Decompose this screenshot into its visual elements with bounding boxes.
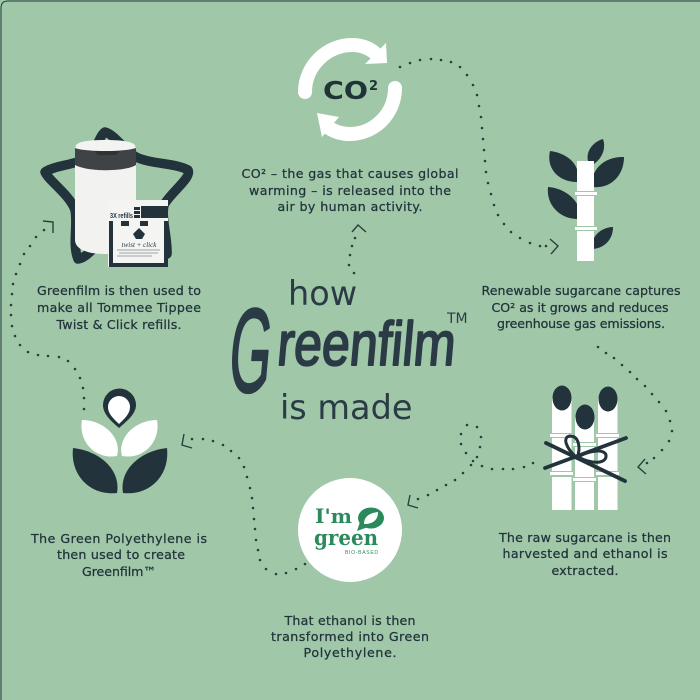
text: harvest step: harvested and ethanol is (502, 546, 668, 561)
dotted arrow: title to CO2 (348, 225, 366, 274)
text: polyethylene step: The Green Polyethylene is (30, 531, 207, 546)
icon: harvested sugarcane bundle (545, 386, 626, 510)
icon: refill box: twist + click (122, 241, 157, 249)
text: ethanol step: That ethanol is then (284, 613, 416, 628)
text: ethanol step (271, 613, 429, 660)
text: refills step: Twist & Click refills. (56, 317, 182, 332)
text: polyethylene step: then used to create (57, 547, 185, 562)
icon: refill box: 3X refills (110, 211, 133, 220)
text: refills step: Greenfilm is then used to (37, 283, 201, 298)
text: sugarcane step (482, 283, 680, 331)
icon: CO2 cycle: CO (323, 76, 368, 105)
icon: I'm green badge: green (314, 525, 378, 550)
dotted arrow: sugarcane to harvest (597, 346, 673, 474)
title: TM (446, 311, 468, 327)
text: sugarcane step: Renewable sugarcane captures (482, 283, 680, 298)
icon: plant with droplet (73, 389, 167, 493)
text: CO2 step: CO² – the gas that causes global (242, 166, 458, 181)
text: CO2 step (242, 166, 458, 214)
icon: I'm green badge: BIO-BASED (345, 550, 378, 556)
title: G (224, 284, 278, 418)
text: CO2 step: warming – is released into the (249, 183, 451, 198)
icon: star behind bin and refill box (45, 132, 188, 259)
icon: CO2 cycle: 2 (369, 79, 378, 94)
icon: I'm green badge (298, 478, 402, 582)
icon: bamboo (548, 139, 624, 261)
text: harvest step: The raw sugarcane is then (498, 530, 671, 545)
text: polyethylene step: Greenfilm™ (82, 564, 156, 579)
text: refills step (37, 283, 201, 332)
title: how (288, 274, 357, 313)
text: refills step: make all Tommee Tippee (37, 300, 201, 315)
text: harvest step (498, 530, 671, 578)
dotted arrow: harvest to ethanol (408, 424, 534, 508)
title (224, 274, 468, 427)
dotted arrow: CO2 to sugarcane (399, 58, 558, 254)
dotted arrow: polyethylene to refills (10, 221, 85, 410)
text: polyethylene step (30, 531, 207, 579)
icon: nappy bin (75, 140, 136, 254)
title: reenfilm (275, 310, 459, 379)
text: ethanol step: transformed into Green (271, 629, 429, 644)
text: sugarcane step: CO² as it grows and reduces (492, 300, 668, 315)
icon: I'm green badge: I'm (315, 504, 352, 528)
text: CO2 step: air by human activity. (278, 199, 422, 214)
icon: CO2 cycle (305, 43, 395, 137)
text: ethanol step: Polyethylene. (304, 645, 396, 660)
icon: refill box (108, 200, 168, 267)
title: is made (280, 388, 412, 427)
dotted arrow: ethanol to polyethylene (182, 434, 306, 575)
text: harvest step: extracted. (552, 563, 618, 578)
text: sugarcane step: greenhouse gas emissions. (497, 316, 665, 331)
